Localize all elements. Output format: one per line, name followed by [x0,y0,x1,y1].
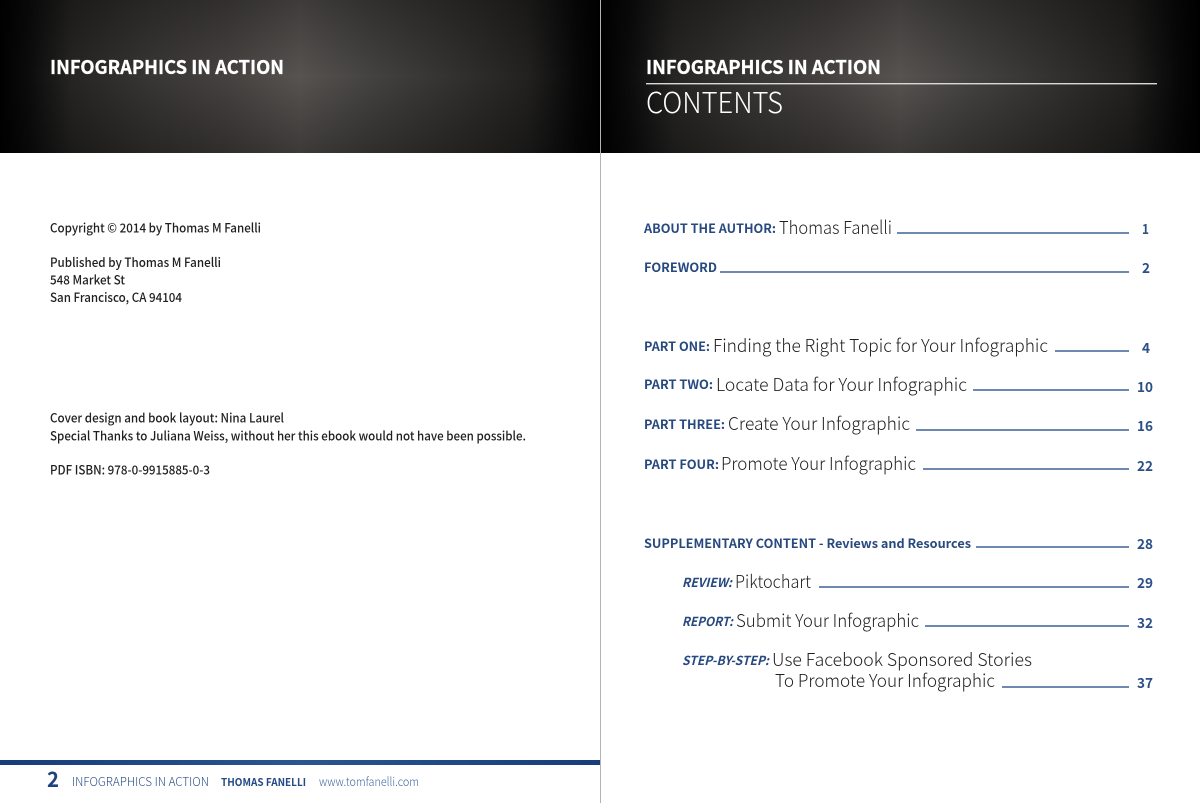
entry: foreword: FOREWORD [644,257,717,276]
entry: report: 32 [1137,613,1153,633]
entry: supplementary content: 28 [1137,534,1153,554]
heading: contents: CONTENTS [646,80,783,122]
panel: right page header band [601,0,1200,153]
entry: review: Piktochart [735,568,812,594]
footer page number: 2 [47,764,59,794]
entry: part three: PART THREE: [644,414,725,433]
entry: part four [644,450,1153,476]
heading: left page title: INFOGRAPHICS IN ACTION [50,53,284,80]
text block: copyright and publisher [50,218,261,306]
entry: part three [644,410,1153,436]
entry: part two: 10 [1137,377,1153,397]
entry: part three: 16 [1137,416,1153,436]
entry: supplementary content [644,533,1153,554]
footer book title: INFOGRAPHICS IN ACTION [72,773,209,790]
page divider [600,0,601,803]
heading: right page title: INFOGRAPHICS IN ACTION [646,53,881,80]
footer website: www.tomfanelli.com [319,773,419,790]
entry: part two: PART TWO: [644,374,713,393]
entry: report: Submit Your Infographic [736,607,919,633]
entry: about the author [643,214,1149,240]
text block: credits [50,408,526,478]
text block: copyright and publisher: Copyright © 2014 by Thomas M Fanelli [50,218,261,236]
entry: part one: PART ONE: [644,336,710,355]
panel: left page header band [0,0,600,153]
table of contents [643,214,1153,693]
entry: review: 29 [1137,573,1153,593]
entry: review [682,568,1153,594]
text block: credits: PDF ISBN: 978-0-9915885-0-3 [50,460,210,478]
footer author: THOMAS FANELLI [221,775,306,790]
entry: step-by-step: STEP-BY-STEP: [682,650,770,669]
footer: left page [0,760,600,794]
entry: foreword [644,257,1150,278]
entry: step-by-step [682,646,1153,693]
text block: copyright and publisher: Published by Thomas M Fanelli [50,252,221,271]
entry: part four: 22 [1137,456,1153,476]
entry: part one [644,332,1150,358]
entry: part two: Locate Data for Your Infographic [716,371,967,397]
entry: part one: 4 [1142,338,1150,358]
entry: about the author: ABOUT THE AUTHOR: [643,218,776,237]
entry: part four: PART FOUR: [644,454,719,473]
entry: report: REPORT: [682,611,734,630]
entry: supplementary content: SUPPLEMENTARY CONTENT - Reviews and Resources [644,533,971,552]
entry: part four: Promote Your Infographic [721,450,916,476]
entry: step-by-step: To Promote Your Infographic [775,667,995,693]
entry: about the author: 1 [1142,219,1149,239]
text block: copyright and publisher: 548 Market St [50,270,125,288]
entry: review: REVIEW: [682,572,733,591]
entry: part one: Finding the Right Topic for Your Infographic [713,332,1048,358]
text block: credits: Cover design and book layout: Nina Laurel [50,408,284,426]
entry: part two [644,371,1153,397]
entry: report [682,607,1153,633]
entry: part three: Create Your Infographic [728,410,910,436]
entry: foreword: 2 [1142,258,1150,278]
text block: copyright and publisher: San Francisco, CA 94104 [50,287,182,306]
entry: step-by-step: 37 [1137,673,1153,693]
entry: about the author: Thomas Fanelli [779,214,892,240]
entry: step-by-step: Use Facebook Sponsored Stories [772,646,1032,672]
text block: credits: Special Thanks to Juliana Weiss, without her this ebook would not have been possible. [50,426,526,444]
